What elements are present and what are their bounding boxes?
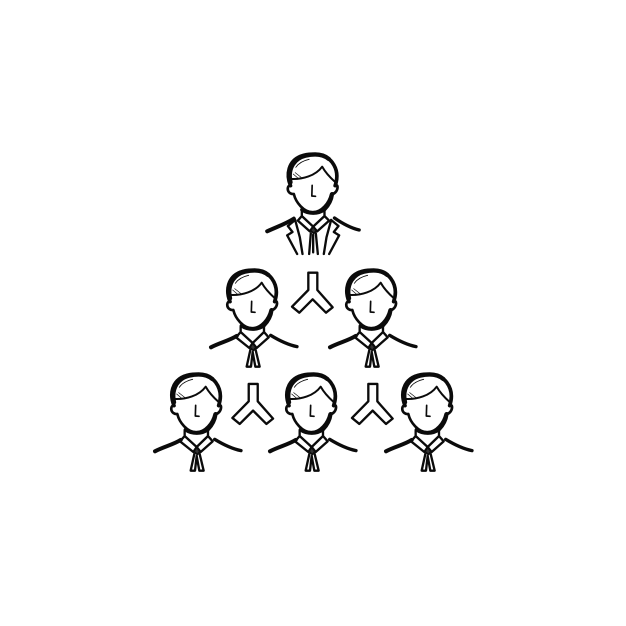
icon: branching connector top: [292, 273, 333, 313]
person: bottom row right: [386, 374, 472, 471]
person: bottom row center: [270, 374, 356, 471]
person: top leader in suit: [267, 154, 359, 254]
person: middle row left: [211, 270, 297, 367]
icon: branching connector bottom left: [232, 384, 273, 424]
icon: branching connector bottom right: [352, 384, 393, 424]
person: middle row right: [330, 270, 416, 367]
person: bottom row left: [155, 374, 241, 471]
